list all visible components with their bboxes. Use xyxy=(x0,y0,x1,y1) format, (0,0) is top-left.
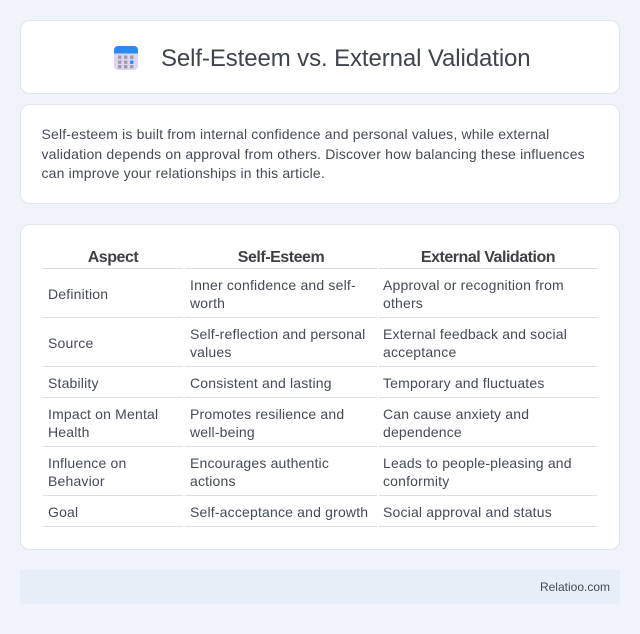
comparison table: others xyxy=(383,295,423,311)
icon: calendar xyxy=(114,46,138,70)
row: Source: Source xyxy=(48,335,93,351)
comparison table: Inner confidence and self- xyxy=(190,277,356,293)
column header: Self-Esteem: Self-Esteem xyxy=(238,249,324,266)
comparison table: dependence xyxy=(383,424,462,440)
comparison table: values xyxy=(190,344,232,360)
title: Self-Esteem vs. External Validation xyxy=(161,45,531,72)
comparison table: Encourages authentic xyxy=(190,455,329,471)
comparison table: worth xyxy=(190,295,225,311)
intro text: validation depends on approval from others. Discover how balancing these influences xyxy=(42,146,585,162)
row: Influence on Behavior: Influence on xyxy=(48,455,126,471)
row: Definition: Definition xyxy=(48,286,108,302)
row: Goal: Goal xyxy=(48,504,78,520)
column header: Aspect: Aspect xyxy=(88,249,138,266)
comparison table: External feedback and social xyxy=(383,326,567,342)
comparison table: Consistent and lasting xyxy=(190,375,332,391)
footer bar xyxy=(20,570,620,604)
comparison table: Self-acceptance and growth xyxy=(190,504,368,520)
column header: External Validation: External Validation xyxy=(421,249,555,266)
footer text: Relatioo.com xyxy=(540,580,610,594)
comparison table: acceptance xyxy=(383,344,456,360)
comparison table: Social approval and status xyxy=(383,504,552,520)
table card xyxy=(20,224,620,550)
title card xyxy=(20,20,620,94)
row: Stability: Stability xyxy=(48,375,99,391)
comparison table: well-being xyxy=(190,424,255,440)
intro text xyxy=(42,126,585,181)
comparison table: Temporary and fluctuates xyxy=(383,375,545,391)
comparison table: conformity xyxy=(383,473,449,489)
row: Influence on Behavior: Behavior xyxy=(48,473,105,489)
comparison table: Promotes resilience and xyxy=(190,406,344,422)
row: Impact on Mental Health: Health xyxy=(48,424,90,440)
comparison table: Approval or recognition from xyxy=(383,277,564,293)
comparison table: actions xyxy=(190,473,236,489)
comparison table: Can cause anxiety and xyxy=(383,406,529,422)
intro text: Self-esteem is built from internal confidence and personal values, while external xyxy=(42,126,549,142)
comparison table: Self-reflection and personal xyxy=(190,326,365,342)
intro card xyxy=(20,104,620,204)
comparison table: Leads to people-pleasing and xyxy=(383,455,572,471)
row: Impact on Mental Health xyxy=(48,406,158,440)
intro text: can improve your relationships in this article. xyxy=(42,165,325,181)
row: Influence on Behavior xyxy=(48,455,126,489)
row: Impact on Mental Health: Impact on Mental xyxy=(48,406,158,422)
